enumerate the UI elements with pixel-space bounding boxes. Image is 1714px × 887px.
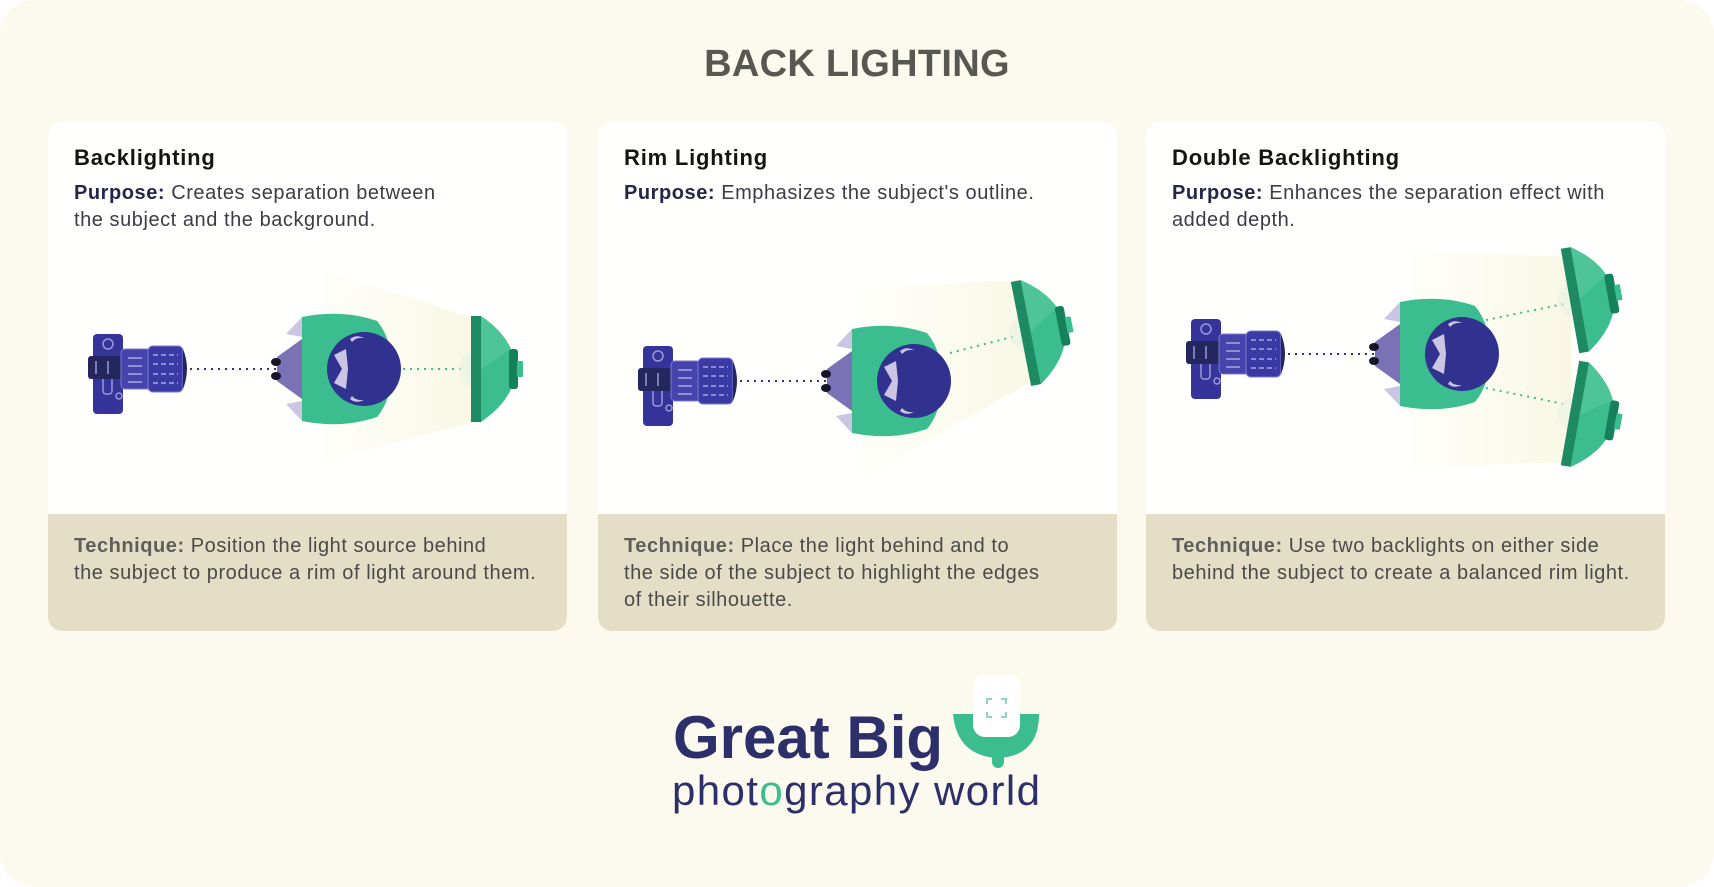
illustration: camera, subject, backlight xyxy=(88,282,523,452)
card heading: Rim Lighting xyxy=(624,145,768,170)
purpose text xyxy=(74,182,436,231)
panel: double backlighting xyxy=(1146,122,1665,631)
logo icon: microphone xyxy=(953,675,1039,768)
purpose text: Purpose: Emphasizes the subject's outline. xyxy=(624,182,1034,204)
title: BACK LIGHTING xyxy=(704,43,1010,85)
technique box xyxy=(1146,514,1665,631)
card heading: Backlighting xyxy=(74,145,216,170)
purpose text: added depth. xyxy=(1172,209,1295,231)
technique box: the side of the subject to highlight the edges xyxy=(624,562,1040,584)
purpose text: the subject and the background. xyxy=(74,209,376,231)
technique box xyxy=(598,514,1117,631)
illustration: camera, subject, two backlights xyxy=(1186,247,1622,467)
technique box: Technique: Position the light source behind xyxy=(74,535,486,557)
technique box xyxy=(48,514,567,631)
illustration: camera, subject, side backlight xyxy=(638,280,1074,454)
card heading: Double Backlighting xyxy=(1172,145,1400,170)
technique box: behind the subject to create a balanced rim light. xyxy=(1172,562,1630,584)
technique box: of their silhouette. xyxy=(624,589,793,611)
technique box: Technique: Use two backlights on either side xyxy=(1172,535,1599,557)
panel: rim lighting xyxy=(598,122,1117,631)
logo text: photography world: photography world xyxy=(672,767,1041,814)
technique box: the subject to produce a rim of light around them. xyxy=(74,562,536,584)
logo text: Great Big: Great Big xyxy=(673,704,943,771)
panel: backlighting xyxy=(48,122,567,631)
purpose text: Purpose: Enhances the separation effect with xyxy=(1172,182,1605,204)
purpose text: Purpose: Creates separation between xyxy=(74,182,436,204)
logo xyxy=(672,675,1041,814)
technique box: Technique: Place the light behind and to xyxy=(624,535,1009,557)
purpose text xyxy=(1172,182,1605,231)
